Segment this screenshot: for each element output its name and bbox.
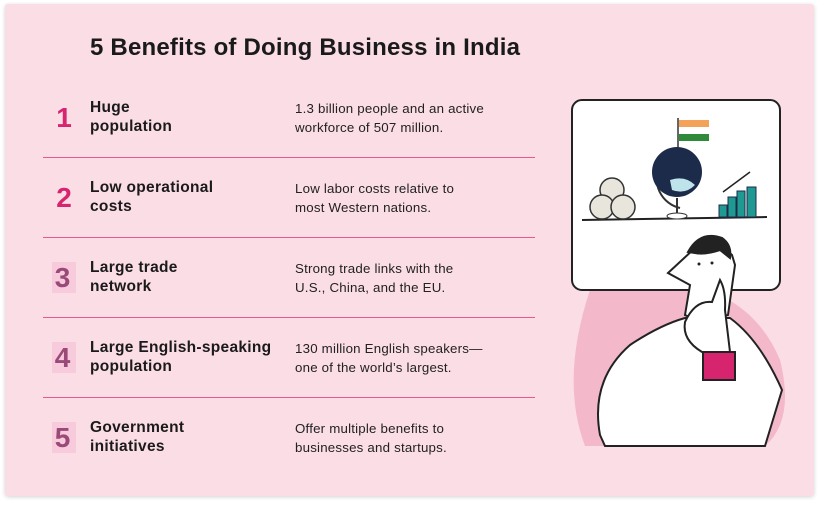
row 2: Low operational (90, 179, 213, 196)
row 1: 1.3 billion people and an active (295, 101, 484, 116)
bar chart (719, 172, 756, 217)
title: 5 Benefits of Doing Business in India (90, 34, 520, 61)
row 4 (43, 339, 535, 398)
row 3: Large trade (90, 259, 178, 276)
row 3: Strong trade links with the (295, 261, 453, 276)
row 2: most Western nations. (295, 200, 431, 215)
row 2 (43, 179, 535, 238)
row 2: Low labor costs relative to (295, 181, 454, 196)
coins (590, 178, 635, 219)
row 5: initiatives (90, 438, 165, 455)
row 4: population (90, 358, 172, 375)
row 1: 1 (56, 102, 72, 133)
illustration: thinking man with board (571, 99, 785, 447)
row 1: population (90, 118, 172, 135)
row 5 (52, 419, 447, 455)
row 4: 4 (55, 342, 70, 373)
flag (677, 118, 679, 148)
row 2: costs (90, 198, 132, 215)
row 5: Offer multiple benefits to (295, 421, 444, 436)
row 1 (43, 99, 535, 158)
row 3: network (90, 278, 152, 295)
background blob (574, 281, 785, 446)
row 4: Large English-speaking (90, 339, 271, 356)
row 5: 5 (55, 422, 70, 453)
row 3: 3 (55, 262, 70, 293)
row 4: 130 million English speakers— (295, 341, 483, 356)
row 3: U.S., China, and the EU. (295, 280, 445, 295)
board (572, 100, 780, 290)
row 5: businesses and startups. (295, 440, 447, 455)
globe (652, 118, 709, 219)
row 1: Huge (90, 99, 130, 116)
man (598, 236, 782, 446)
row 2: 2 (56, 182, 72, 213)
row 1: workforce of 507 million. (295, 120, 443, 135)
row 5: Government (90, 419, 184, 436)
row 3 (43, 259, 535, 318)
row 4: one of the world’s largest. (295, 360, 452, 375)
